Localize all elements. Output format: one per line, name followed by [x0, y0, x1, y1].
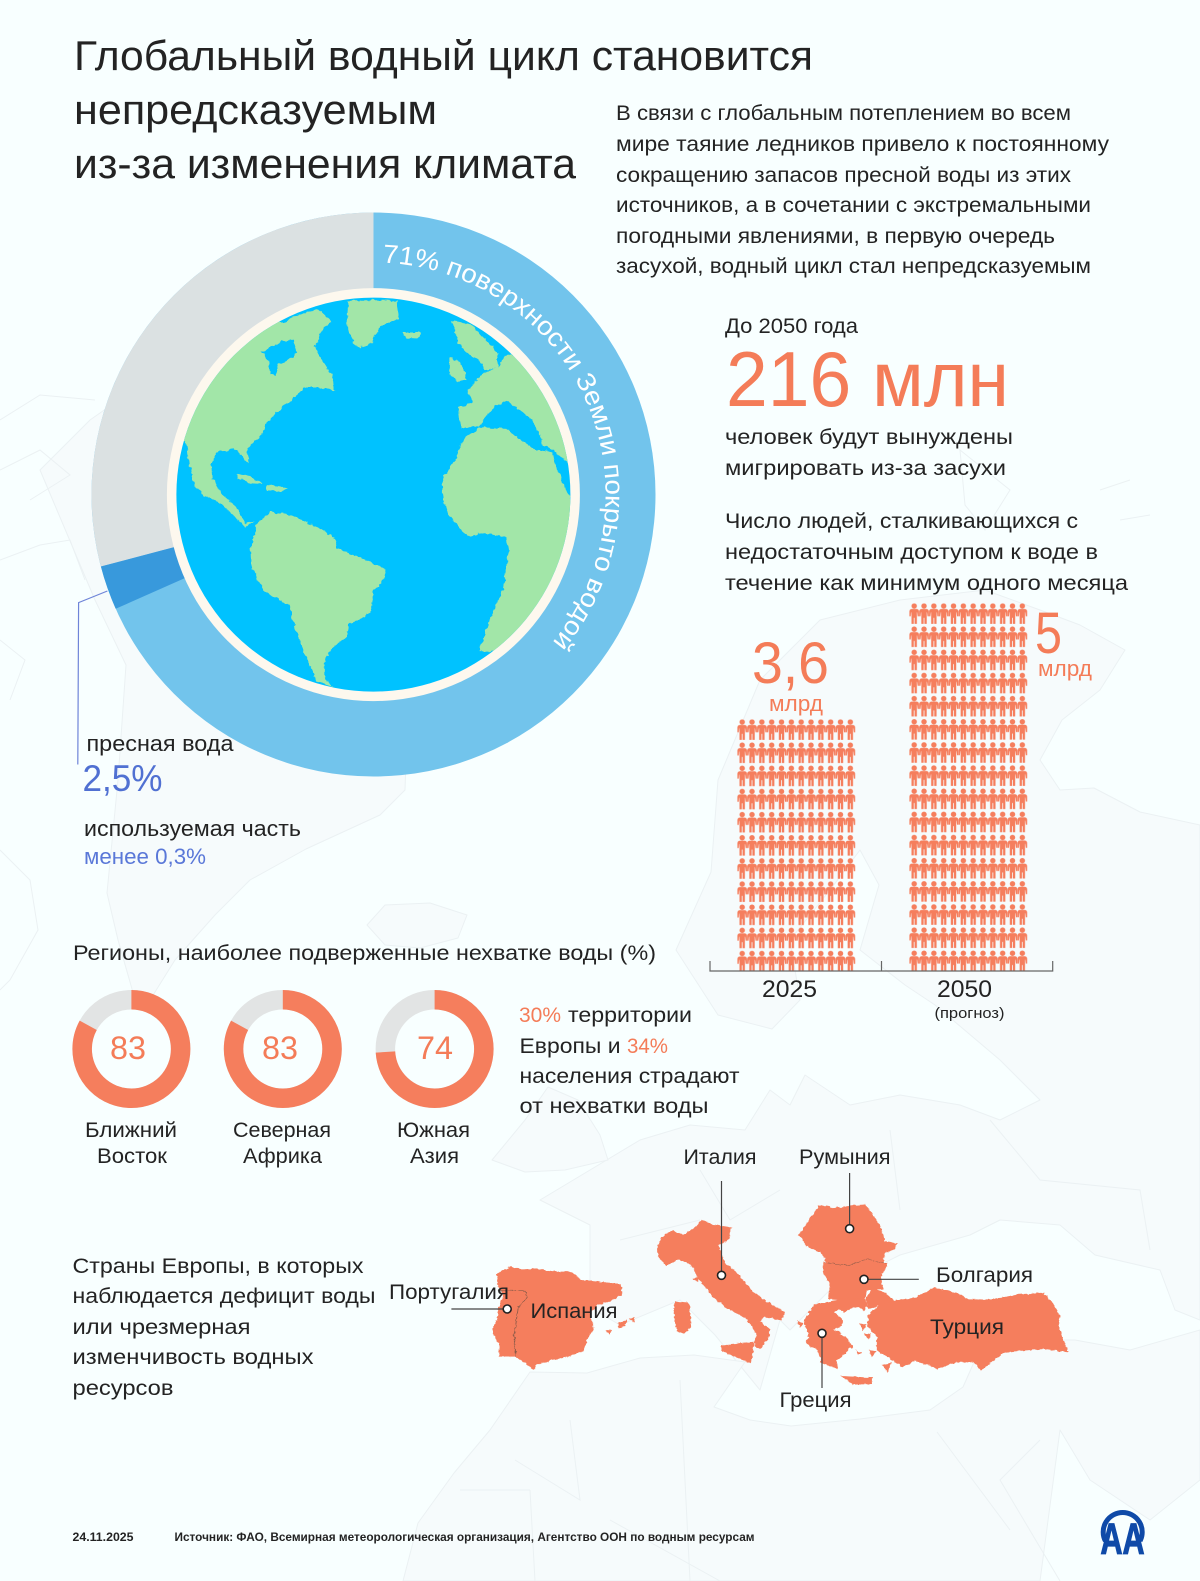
Europe water shortage note: от нехватки воды: [520, 1094, 708, 1118]
title: непредсказуемым: [74, 86, 437, 133]
label: Bulgaria: Болгария: [936, 1264, 1033, 1287]
background map: [0, 385, 1200, 1581]
fresh water stats: используемая часть: [84, 816, 301, 841]
migration stat: человек будут вынуждены: [725, 425, 1013, 449]
Europe water shortage note: 34%: [627, 1034, 668, 1058]
label: Romania: [799, 1146, 890, 1233]
label: Turkey: Турция: [930, 1316, 1004, 1339]
icon: globe: [176, 298, 570, 692]
title: [74, 32, 813, 187]
donut: North Africa: 83: [262, 1030, 298, 1066]
donut: North Africa: Африка: [243, 1144, 322, 1168]
intro paragraph: погодными явлениями, в первую очередь: [616, 224, 1055, 248]
ring: fresh water share: [101, 494, 374, 609]
ring: ocean share: [92, 212, 656, 776]
globe border: [167, 288, 580, 701]
fresh water stats: [82, 731, 301, 869]
label: Portugal: [389, 1281, 511, 1313]
icon: AA logo: AA: [1100, 1514, 1144, 1564]
chart: people pictogram: [710, 601, 1092, 1022]
map: highlighted countries: [389, 1146, 1068, 1412]
migration stat: [725, 314, 1013, 480]
label: Italy: [684, 1146, 756, 1279]
donut: Middle East: 83: [110, 1030, 146, 1066]
bar 2025: [737, 719, 855, 971]
label 2050: 2050: [937, 976, 992, 1003]
footer source: Источник: ФАО, Всемирная метеорологическая организация, Агентство ООН по водным ресурсам: [174, 1532, 754, 1544]
fresh water stats: пресная вода: [86, 731, 234, 756]
migration stat: мигрировать из-за засухи: [725, 456, 1006, 480]
European countries text: наблюдается дефицит воды: [72, 1284, 376, 1308]
fresh water leader line: [78, 591, 107, 764]
ring label: 71% поверхности Земли покрыто водой: [385, 244, 620, 652]
intro paragraph: [616, 101, 1109, 278]
water access heading: недостаточным доступом к воде в: [725, 540, 1098, 564]
footer date: 24.11.2025: [72, 1532, 134, 1544]
water access heading: течение как минимум одного месяца: [725, 571, 1128, 595]
intro paragraph: засухой, водный цикл стал непредсказуемым: [616, 254, 1091, 278]
label 2025: 2025: [762, 976, 817, 1003]
value 2025: 3,6: [752, 631, 829, 696]
donut: South Asia: 74: [417, 1030, 453, 1066]
donut: South Asia: Южная: [397, 1118, 470, 1142]
donut: Middle East: Ближний: [85, 1118, 177, 1142]
bar 2050: [909, 603, 1027, 971]
donut: Middle East: [82, 1000, 181, 1168]
European countries text: Страны Европы, в которых: [72, 1254, 364, 1278]
label: Portugal: Португалия: [389, 1281, 509, 1304]
fresh water stats: менее 0,3%: [84, 844, 206, 869]
donut: North Africa: Северная: [233, 1118, 331, 1142]
water access heading: Число людей, сталкивающихся с: [725, 509, 1078, 533]
icon: AA logo: [1100, 1513, 1144, 1564]
country shapes: [492, 1204, 1068, 1385]
intro paragraph: мире таяние ледников привело к постоянному: [616, 132, 1109, 156]
fresh water stats: 2,5%: [82, 758, 162, 799]
Europe water shortage note: 30%: [519, 1003, 561, 1027]
donut: Middle East: Восток: [97, 1144, 168, 1168]
label: Greece: Греция: [780, 1389, 852, 1412]
water access heading: [725, 509, 1128, 595]
value 2050: 5: [1035, 601, 1062, 666]
label: Italy: Италия: [684, 1146, 756, 1169]
Europe water shortage note: [519, 1003, 740, 1118]
intro paragraph: сокращению запасов пресной воды из этих: [616, 163, 1071, 187]
label: Romania: Румыния: [799, 1146, 890, 1169]
unit 2050: млрд: [1038, 656, 1092, 681]
European countries text: ресурсов: [72, 1376, 174, 1400]
intro paragraph: источников, а в сочетании с экстремальными: [616, 193, 1091, 217]
title: из-за изменения климата: [74, 140, 577, 187]
intro paragraph: В связи с глобальным потеплением во всем: [616, 101, 1071, 125]
label: Greece: [780, 1329, 852, 1412]
title: Глобальный водный цикл становится: [74, 32, 813, 79]
migration stat: До 2050 года: [725, 314, 858, 338]
axis: [710, 961, 1053, 971]
European countries text: [72, 1254, 376, 1400]
panel: water ring and globe: [92, 212, 656, 776]
label: Bulgaria: [860, 1264, 1033, 1287]
donut: South Asia: [385, 1000, 484, 1168]
migration stat: 216 млн: [726, 335, 1009, 423]
European countries text: или чрезмерная: [72, 1315, 250, 1339]
donut: South Asia: Азия: [410, 1144, 459, 1168]
regions heading: Регионы, наиболее подверженные нехватке воды (%): [73, 941, 656, 965]
Europe water shortage note: территории: [568, 1003, 692, 1027]
European countries text: изменчивость водных: [72, 1345, 314, 1369]
forecast note: (прогноз): [934, 1005, 1004, 1022]
ring: land share: [92, 212, 374, 566]
donut: North Africa: [233, 1000, 332, 1168]
label: Spain: Испания: [530, 1300, 618, 1323]
Europe water shortage note: населения страдают: [520, 1064, 740, 1088]
Europe water shortage note: Европы и: [520, 1034, 620, 1058]
unit 2025: млрд: [769, 691, 823, 716]
